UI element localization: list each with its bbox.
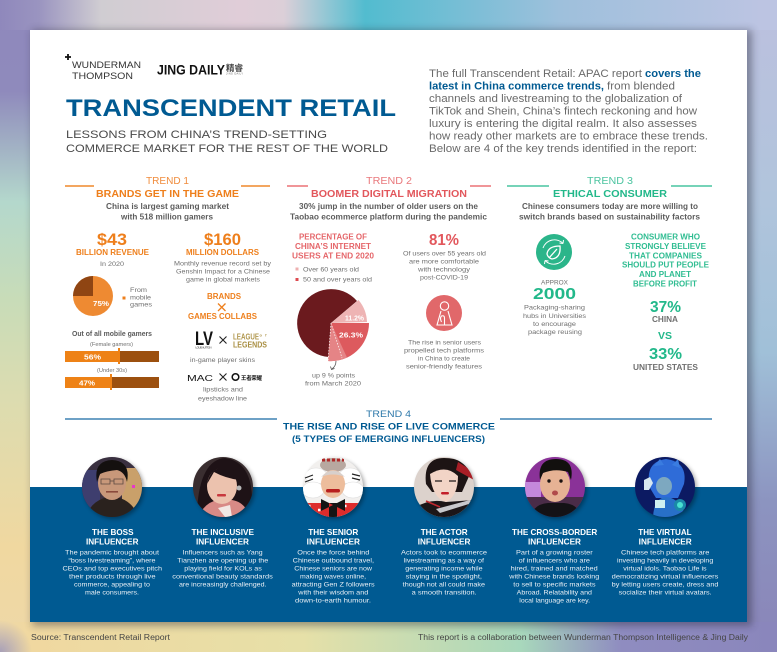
stat: $160 million dollars bbox=[174, 230, 272, 284]
senior platforms note bbox=[404, 340, 485, 370]
virtual text: investing heavily in developing bbox=[617, 558, 714, 565]
consumer belief heading: STRONGLY BELIEVE bbox=[625, 242, 707, 251]
trend 4 heading: THE RISE AND RISE OF LIVE COMMERCE bbox=[283, 422, 495, 432]
trend 3 summary: switch brands based on sustainability factors bbox=[519, 212, 701, 222]
boss text: male consumers. bbox=[85, 590, 139, 597]
stat: 81%: post-COVID-19 bbox=[420, 274, 468, 282]
trend 1 header: TREND 1 bbox=[146, 175, 189, 187]
logo: Jing Daily: JING DAILY bbox=[157, 62, 226, 78]
intro paragraph: The full Transcendent Retail: APAC report bbox=[429, 68, 642, 80]
subtitle: LESSONS FROM CHINA’S TREND-SETTING bbox=[66, 129, 327, 141]
senior text: THE SENIOR bbox=[308, 528, 358, 537]
logo: Wunderman Thompson: WUNDERMAN bbox=[72, 60, 141, 71]
actor text: livestreaming as a way of bbox=[404, 558, 484, 565]
senior text: with their wisdom and bbox=[297, 590, 369, 597]
trend 2 header bbox=[287, 175, 491, 200]
inclusive text: INFLUENCER bbox=[196, 538, 249, 546]
panel: cross-border influencer bbox=[508, 457, 600, 605]
intro paragraph: luxury is entering the digital realm. It also assesses bbox=[429, 118, 697, 130]
title: TRANSCENDENT RETAIL bbox=[66, 95, 396, 122]
virtual text: democratizing virtual influencers bbox=[612, 574, 719, 581]
stat: 81% bbox=[403, 232, 486, 282]
pie chart: mobile games 75%: games bbox=[130, 302, 153, 308]
comparison: China vs United States bbox=[633, 299, 699, 372]
stat: approx 2000 hubs: Packaging-sharing bbox=[524, 304, 585, 312]
virtual text: by letting users create, dress and bbox=[612, 582, 719, 589]
panel: virtual influencer bbox=[612, 457, 719, 597]
trend 1 summary bbox=[106, 202, 229, 222]
logos: Louis Vuitton x League of Legends: LEGENDS bbox=[233, 340, 267, 350]
trend 2 header: TREND 2 bbox=[366, 175, 412, 187]
chart heading and legend: Over 60 years old bbox=[303, 266, 359, 274]
subtitle: COMMERCE MARKET FOR THE REST OF THE WORLD bbox=[66, 143, 388, 155]
panel: trend 3 ethical consumer bbox=[507, 175, 712, 372]
panel: senior influencer bbox=[292, 457, 375, 605]
trend 4 heading: TREND 4 bbox=[366, 409, 411, 420]
trend 3 summary: Chinese consumers today are more willing to bbox=[522, 202, 698, 211]
trend 3 summary bbox=[519, 202, 701, 222]
inclusive text: Influencers such as Yang bbox=[183, 550, 263, 556]
panel: trend 2 boomer digital migration bbox=[287, 175, 491, 388]
inclusive text: THE INCLUSIVE bbox=[192, 528, 255, 537]
portrait: boss bbox=[82, 457, 144, 519]
comparison: China vs United States: UNITED STATES bbox=[633, 363, 699, 372]
actor text bbox=[401, 528, 487, 597]
boss text: The pandemic brought about bbox=[65, 550, 159, 556]
trend 3 header bbox=[507, 175, 712, 200]
bar chart: mobile gamers bbox=[65, 329, 159, 390]
cross-border text: Abroad. Relatability and bbox=[517, 590, 592, 597]
trend 3 header: TREND 3 bbox=[587, 175, 633, 187]
logos: Louis Vuitton x League of Legends: LOUIS VUITTON bbox=[196, 346, 212, 350]
consumer belief heading: BEFORE PROFIT bbox=[633, 280, 697, 288]
stat: 81%: 81% bbox=[429, 232, 459, 249]
panel: inclusive influencer bbox=[172, 457, 274, 589]
actor text: though not all could make bbox=[403, 582, 485, 589]
intro paragraph: how ready other markets are to embrace these trends. bbox=[429, 130, 708, 142]
actor text: THE ACTOR bbox=[421, 528, 468, 537]
logos: Louis Vuitton x League of Legends bbox=[190, 329, 267, 364]
footer source: Source: Transcendent Retail Report bbox=[31, 633, 171, 642]
comparison: China vs United States: VS bbox=[658, 331, 672, 342]
portrait: actor bbox=[414, 457, 476, 519]
portrait: inclusive bbox=[193, 457, 255, 519]
stat: approx 2000 hubs: package reusing bbox=[528, 329, 582, 336]
portrait: cross-border bbox=[525, 457, 587, 519]
pie chart: internet users by age bbox=[297, 289, 369, 388]
boss text: their products through live bbox=[69, 574, 156, 581]
cross-border text: THE CROSS-BORDER bbox=[512, 528, 597, 537]
cross-border text: hired, trained and matched bbox=[511, 566, 598, 573]
portrait: virtual bbox=[635, 457, 697, 519]
intro paragraph: TikTok and Shein, China’s fintech reckoning and how bbox=[429, 106, 697, 118]
chart heading and legend: USERS AT END 2020 bbox=[292, 252, 375, 260]
pie chart: mobile games 75%: 75% bbox=[93, 299, 109, 308]
boss text: THE BOSS bbox=[92, 528, 134, 537]
trend 1 summary: China is largest gaming market bbox=[106, 202, 229, 211]
virtual text bbox=[612, 528, 719, 597]
stat: $43 billion revenue: $43 bbox=[97, 230, 127, 249]
pie chart: internet users by age: 26.3% bbox=[339, 330, 363, 340]
chart heading and legend: 50 and over years old bbox=[303, 276, 372, 284]
trend 4 heading bbox=[65, 409, 712, 445]
consumer belief heading: SHOULD PUT PEOPLE bbox=[622, 260, 710, 270]
logos: MAC x Honor of Kings: lipsticks and bbox=[203, 386, 243, 394]
intro paragraph: Below are 4 of the key trends identified in the report: bbox=[429, 143, 697, 155]
cross-border text: local language are key. bbox=[519, 598, 590, 605]
boss text: “boss livestreaming”, where bbox=[68, 558, 156, 565]
stat: approx 2000 hubs: to encourage bbox=[533, 321, 576, 328]
senior text: INFLUENCER bbox=[307, 538, 360, 546]
trend 2 summary: Taobao ecommerce platform during the pandemic bbox=[290, 212, 488, 222]
consumer belief heading: THAT COMPANIES bbox=[629, 252, 703, 260]
logos: Louis Vuitton x League of Legends: in-game player skins bbox=[190, 357, 256, 364]
senior text: Chinese outbound travel, bbox=[293, 558, 374, 565]
boss text bbox=[62, 528, 162, 597]
stat: approx 2000 hubs: 2000 bbox=[533, 286, 576, 303]
senior platforms note: propelled tech platforms bbox=[404, 348, 485, 354]
stat: 81%: with technology bbox=[417, 266, 471, 274]
stat: $160 million dollars: $160 bbox=[204, 230, 241, 249]
stat: $160 million dollars: Monthly revenue record set by bbox=[174, 260, 272, 268]
stat: 81%: are more comfortable bbox=[409, 258, 479, 266]
intro paragraph: channels and livestreaming to the globalization of bbox=[429, 93, 682, 105]
logo: Jing Daily: 精睿 bbox=[226, 63, 243, 73]
virtual text: THE VIRTUAL bbox=[638, 528, 692, 537]
logos: Louis Vuitton x League of Legends: LEAGUE bbox=[233, 332, 259, 342]
virtual text: INFLUENCER bbox=[639, 538, 692, 546]
trend 2 header: BOOMER DIGITAL MIGRATION bbox=[311, 188, 467, 200]
boss text: CEOs and top executives pitch bbox=[62, 566, 162, 573]
consumer belief heading: CONSUMER WHO bbox=[631, 232, 700, 242]
pie chart: internet users by age: 11.2% bbox=[345, 314, 364, 322]
actor text: Actors took to ecommerce bbox=[401, 550, 487, 556]
pie chart: internet users by age: up 9 % points bbox=[312, 372, 356, 380]
logos: Louis Vuitton x League of Legends: of bbox=[260, 332, 267, 338]
logos: MAC x Honor of Kings: eyeshadow line bbox=[198, 396, 247, 402]
inclusive text: Tianzhen are opening up the bbox=[177, 558, 269, 565]
consumer belief heading bbox=[622, 232, 710, 288]
chart heading and legend: CHINA’S INTERNET bbox=[295, 242, 371, 251]
panel: trend 1 brands get in the game bbox=[65, 175, 272, 402]
virtual text: Chinese tech platforms are bbox=[621, 550, 710, 556]
panel: actor influencer bbox=[401, 457, 487, 597]
bar chart: mobile gamers: 47% bbox=[79, 378, 95, 388]
senior text: Chinese seniors are now bbox=[294, 566, 372, 573]
blue influencer band bbox=[30, 487, 747, 622]
cross-border text: Part of a growing roster bbox=[516, 550, 594, 556]
inclusive text: playing field for KOLs as bbox=[184, 566, 263, 573]
portrait: senior bbox=[302, 457, 365, 519]
inclusive text: are increasingly challenged. bbox=[179, 582, 267, 589]
senior platforms note: The rise in senior users bbox=[408, 340, 482, 346]
intro paragraph: from blended bbox=[607, 80, 675, 92]
trend 1 summary: with 518 million gamers bbox=[120, 212, 214, 222]
boss text: commerce, appealing to bbox=[74, 582, 150, 589]
cross-border text: to sell to specific markets bbox=[513, 582, 596, 589]
pie chart: mobile games 75%: From bbox=[130, 287, 147, 294]
bar chart: mobile gamers: (Female gamers) bbox=[90, 342, 133, 348]
logos: MAC x Honor of Kings: MAC bbox=[187, 374, 213, 383]
consumer belief heading: AND PLANET bbox=[639, 270, 691, 279]
senior text bbox=[292, 528, 375, 605]
icon: recycling leaf bbox=[536, 234, 572, 270]
actor text: INFLUENCER bbox=[418, 538, 470, 546]
logos: MAC x Honor of Kings bbox=[187, 374, 263, 402]
stat: $160 million dollars: Genshin Impact for a Chinese bbox=[176, 268, 270, 276]
cross-border text bbox=[508, 528, 600, 605]
stat: approx 2000 hubs: hubs in Universities bbox=[523, 313, 587, 320]
logo: Wunderman Thompson bbox=[65, 54, 141, 82]
pie chart: mobile games 75%: mobile bbox=[130, 294, 151, 302]
trend 3 header: ETHICAL CONSUMER bbox=[553, 188, 667, 200]
bar chart: mobile gamers: Out of all mobile gamers bbox=[72, 329, 152, 338]
comparison: China vs United States: 33% bbox=[649, 346, 682, 363]
senior text: Once the force behind bbox=[297, 550, 370, 556]
virtual text: socialize their virtual avatars. bbox=[619, 590, 712, 597]
brands x games collabs heading: BRANDS bbox=[207, 292, 242, 301]
senior text: making waves online, bbox=[300, 574, 366, 581]
stat: approx 2000 hubs bbox=[523, 280, 587, 336]
cross-border text: of influencers who are bbox=[519, 558, 590, 565]
stat: $160 million dollars: MILLION DOLLARS bbox=[186, 248, 260, 257]
subtitle bbox=[66, 129, 388, 155]
comparison: China vs United States: 37% bbox=[650, 299, 681, 316]
icon: senior person bbox=[426, 295, 462, 331]
stat: $160 million dollars: game in global markets bbox=[186, 276, 261, 284]
logo: Jing Daily: JING DAILY bbox=[226, 72, 243, 76]
bar chart: mobile gamers: (Under 30s) bbox=[97, 368, 127, 374]
cross-border text: INFLUENCER bbox=[528, 538, 581, 546]
stat: $43 billion revenue: BILLION REVENUE bbox=[76, 248, 150, 257]
bar chart: mobile gamers: 56% bbox=[84, 352, 101, 362]
intro paragraph: latest in China commerce trends, bbox=[429, 80, 604, 92]
stat: $43 billion revenue: In 2020 bbox=[100, 261, 124, 268]
intro paragraph: covers the bbox=[645, 68, 701, 80]
senior platforms note: in China to create bbox=[418, 356, 470, 362]
logos: MAC x Honor of Kings: 王者荣耀 bbox=[241, 374, 263, 382]
trend 4 heading: (5 TYPES OF EMERGING INFLUENCERS) bbox=[292, 434, 485, 445]
brands x games collabs heading: GAMES COLLABS bbox=[188, 312, 258, 321]
logos: Louis Vuitton x League of Legends: LV bbox=[195, 329, 213, 350]
trend 2 summary bbox=[290, 202, 488, 222]
virtual text: virtual idols. Taobao Life is bbox=[623, 566, 707, 573]
logo: Wunderman Thompson: THOMPSON bbox=[72, 71, 133, 82]
trend 1 header: BRANDS GET IN THE GAME bbox=[96, 188, 239, 200]
stat: $43 billion revenue bbox=[76, 230, 150, 268]
pie chart: internet users by age: from March 2020 bbox=[305, 380, 361, 388]
senior platforms note: senior-friendly features bbox=[406, 364, 483, 370]
footer credit: This report is a collaboration between Wunderman Thompson Intelligence & Jing Daily bbox=[418, 633, 748, 642]
stat: 81%: Of users over 55 years old bbox=[403, 250, 486, 258]
senior text: down-to-earth humour. bbox=[295, 598, 371, 605]
comparison: China vs United States: CHINA bbox=[652, 315, 678, 324]
senior text: attracting Gen Z followers bbox=[292, 582, 375, 589]
actor text: staying in the spotlight, bbox=[406, 574, 482, 581]
chart heading and legend bbox=[292, 232, 375, 284]
trend 2 summary: 30% jump in the number of older users on the bbox=[299, 202, 479, 211]
inclusive text: conventional beauty standards bbox=[172, 574, 274, 581]
stat: approx 2000 hubs: APPROX bbox=[541, 280, 568, 286]
pie chart: mobile games 75% bbox=[73, 276, 153, 316]
actor text: a smooth transition. bbox=[412, 590, 477, 597]
inclusive text bbox=[172, 528, 274, 589]
boss text: INFLUENCER bbox=[86, 538, 139, 546]
cross-border text: with Chinese brands looking bbox=[508, 574, 600, 581]
panel: boss influencer bbox=[62, 457, 162, 597]
chart heading and legend: PERCENTAGE OF bbox=[299, 232, 367, 242]
intro paragraph bbox=[429, 68, 708, 155]
brands x games collabs heading bbox=[188, 292, 258, 321]
trend 1 header bbox=[65, 175, 270, 200]
actor text: generating income while bbox=[405, 566, 483, 573]
